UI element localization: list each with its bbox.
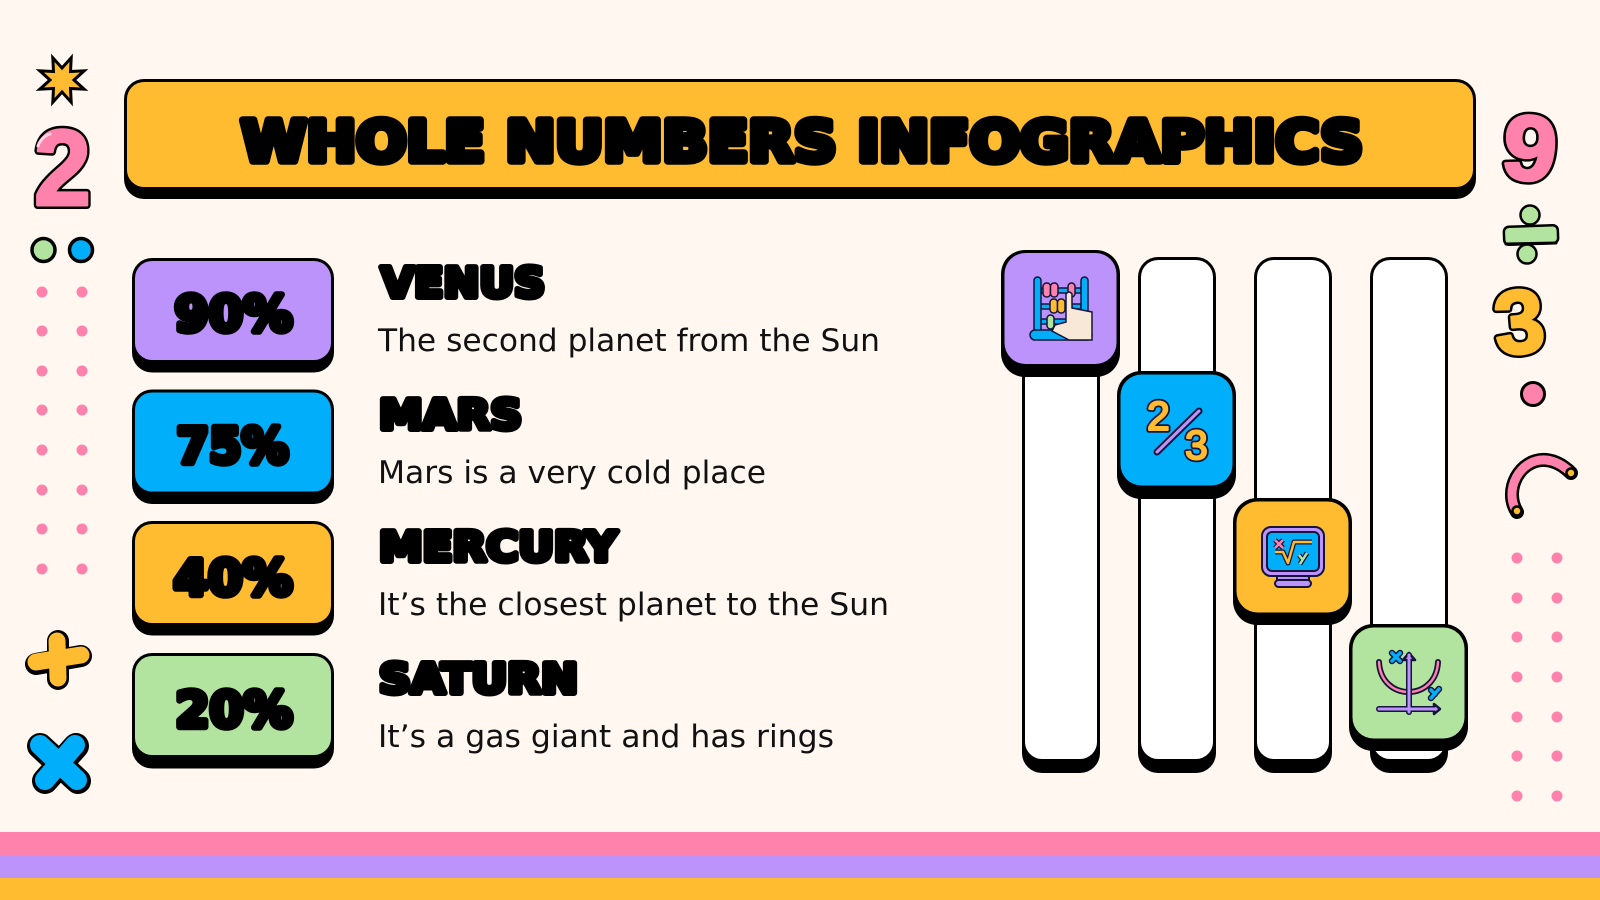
slider track 4	[1370, 257, 1448, 773]
panel: Mars row: Mars is a very cold place	[378, 455, 766, 491]
number 3: 3	[1490, 271, 1549, 375]
panel: Mercury row: MERCURY	[379, 523, 618, 571]
panel: Mars row: MARS	[379, 391, 522, 439]
icon: abacus	[1030, 277, 1092, 340]
icon: pink circle	[1522, 382, 1544, 406]
panel: Venus row	[132, 258, 880, 372]
right dot grid	[1512, 552, 1562, 802]
title banner: WHOLE NUMBERS INFOGRAPHICS	[241, 110, 1363, 175]
slider track 1	[1022, 257, 1100, 773]
slider track 2	[1138, 257, 1216, 773]
slider knob 2: fraction	[1117, 371, 1236, 499]
slider knob 1: abacus	[1001, 250, 1120, 377]
title banner	[124, 79, 1476, 199]
panel: Saturn row	[132, 653, 834, 768]
icon: arc	[1512, 460, 1576, 516]
icon: plus	[36, 641, 81, 679]
icon: parabola on axes	[1379, 653, 1440, 714]
slider track 3	[1254, 257, 1332, 773]
slider knob 3: monitor	[1233, 498, 1352, 625]
number 9: 9	[1498, 95, 1562, 203]
footer stripes	[0, 832, 1600, 900]
icon: computer monitor with root	[1262, 527, 1324, 587]
icon: multiply	[40, 745, 78, 781]
panel: Mercury row: 40%	[174, 550, 292, 607]
number 9: 9	[1498, 95, 1562, 203]
icon: two thirds fraction: 2	[1147, 393, 1170, 439]
icon: star	[40, 58, 84, 102]
panel: Venus row: 90%	[174, 286, 292, 343]
panel: Mercury row: It’s the closest planet to the Sun	[378, 587, 889, 623]
left dot grid	[36, 286, 88, 574]
number 3: 3	[1490, 271, 1549, 375]
panel: Saturn row: 20%	[176, 682, 292, 739]
green and blue circles	[32, 238, 92, 262]
icon: two thirds fraction: 3	[1185, 422, 1208, 468]
icon: two thirds fraction	[1147, 393, 1208, 468]
panel: Venus row: VENUS	[381, 259, 545, 307]
panel: Mars row	[132, 390, 766, 504]
number 2: 2	[34, 107, 91, 228]
number 2: 2	[34, 107, 91, 228]
panel: Venus row: The second planet from the Sun	[377, 323, 880, 359]
panel: Saturn row: It’s a gas giant and has rings	[378, 719, 834, 755]
panel: Mars row: 75%	[176, 418, 288, 475]
icon: two thirds fraction: 3	[1185, 422, 1208, 468]
icon: two thirds fraction: 2	[1147, 393, 1170, 439]
panel: Mercury row	[132, 521, 889, 636]
panel: Saturn row: SATURN	[379, 655, 578, 703]
slider knob 4: parabola graph	[1349, 624, 1468, 751]
icon: divide	[1504, 206, 1558, 264]
